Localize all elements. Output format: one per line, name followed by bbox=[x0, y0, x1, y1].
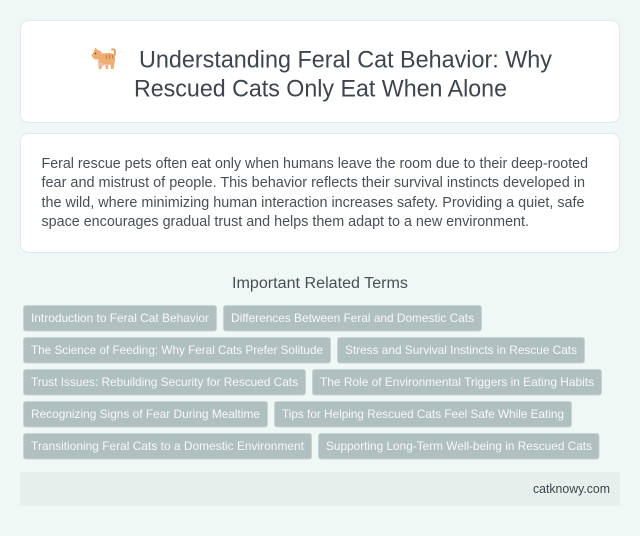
footer text: catknowy.com bbox=[533, 482, 610, 496]
title text: Rescued Cats Only Eat When Alone bbox=[134, 76, 507, 102]
panel: description card bbox=[20, 134, 620, 252]
tag bbox=[312, 370, 602, 395]
description text: Feral rescue pets often eat only when humans leave the room due to their deep-rooted bbox=[42, 156, 588, 172]
description text: fear and mistrust of people. This behavior reflects their survival instincts developed in bbox=[42, 175, 585, 191]
tag: Supporting Long-Term Well-being in Rescued Cats bbox=[326, 439, 592, 453]
tag bbox=[24, 402, 268, 427]
heading: related terms: Important Related Terms bbox=[232, 275, 408, 292]
tag: Tips for Helping Rescued Cats Feel Safe While Eating bbox=[282, 407, 564, 421]
tag: Introduction to Feral Cat Behavior bbox=[31, 311, 209, 325]
icon: cat bbox=[92, 48, 116, 69]
tag: Transitioning Feral Cats to a Domestic Environment bbox=[31, 439, 305, 453]
description text: the wild, where minimizing human interaction increases safety. Providing a quiet, safe bbox=[42, 195, 584, 211]
title text bbox=[134, 46, 553, 102]
description text bbox=[42, 156, 588, 230]
tag bbox=[24, 434, 312, 459]
tag bbox=[24, 306, 216, 331]
tag bbox=[24, 370, 306, 395]
tag list bbox=[24, 306, 602, 459]
tag bbox=[318, 434, 599, 459]
tag bbox=[338, 338, 584, 363]
tag: The Science of Feeding: Why Feral Cats Prefer Solitude bbox=[31, 343, 323, 357]
tag: Differences Between Feral and Domestic Cats bbox=[231, 311, 474, 325]
tag: Stress and Survival Instincts in Rescue Cats bbox=[345, 343, 577, 357]
title text: Understanding Feral Cat Behavior: Why bbox=[139, 46, 553, 74]
tag: The Role of Environmental Triggers in Eating Habits bbox=[320, 375, 594, 389]
footer bar bbox=[20, 472, 620, 506]
tag: Trust Issues: Rebuilding Security for Rescued Cats bbox=[31, 375, 298, 389]
tag bbox=[24, 338, 330, 363]
tag bbox=[274, 402, 572, 427]
tag: Recognizing Signs of Fear During Mealtime bbox=[31, 407, 260, 421]
tag bbox=[224, 306, 482, 331]
panel: title card bbox=[20, 20, 620, 122]
description text: space encourages gradual trust and helps them adapt to a new environment. bbox=[42, 214, 529, 230]
